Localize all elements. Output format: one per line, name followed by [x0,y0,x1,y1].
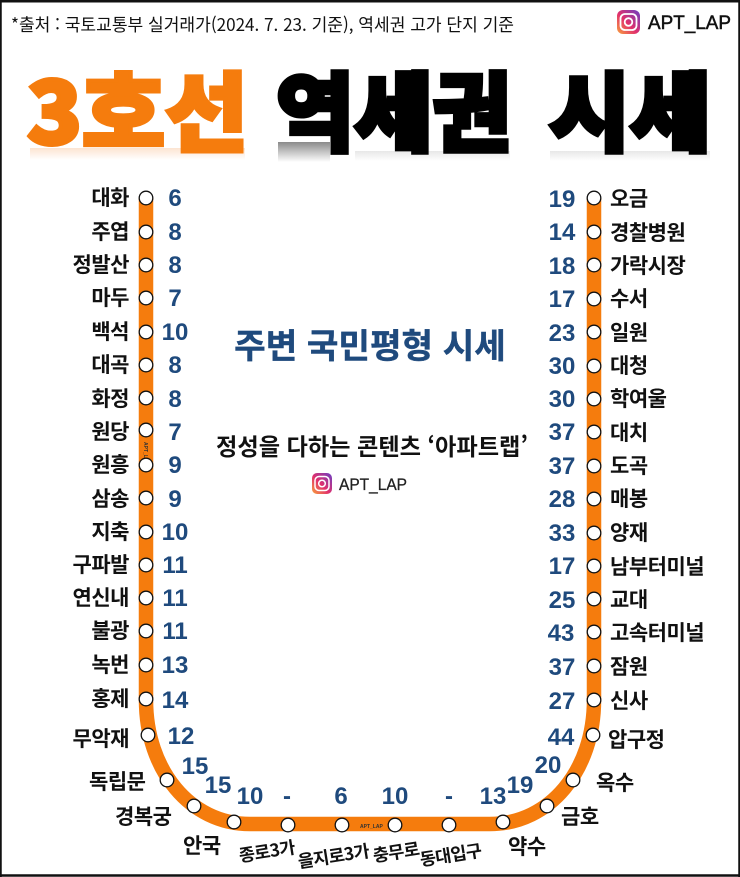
station names: left: 지축 [91,516,129,546]
prices: bottom: 15 [205,772,231,799]
station names: left: 백석 [91,316,129,346]
station names: right: 가락시장 [610,250,685,280]
prices: left: 13 [162,652,188,679]
stations: left column [139,191,155,742]
prices: bottom: 10 [382,783,408,810]
station names: left: 연신내 [73,582,129,612]
station names: left: 홍제 [91,683,129,713]
prices: right: 27 [549,688,575,715]
station names: right: 양재 [610,517,648,547]
prices: right: 37 [549,419,575,446]
station names: left: 마두 [91,282,129,312]
station names: right: 신사 [610,685,648,715]
prices: left [162,185,194,750]
station names: right: 매봉 [610,483,648,513]
station names: right: 경찰병원 [610,217,685,247]
title reflection [30,142,710,162]
center brand [312,473,407,494]
station names: right: 압구정 [608,724,664,754]
title: 역세권: 역세권 [276,44,511,169]
station names: bottom: 독립문 [89,766,146,796]
prices: right: 37 [549,453,575,480]
station names: bottom: 경복궁 [115,801,172,831]
station names: left: 대화 [91,182,129,212]
prices: bottom: - [283,783,291,810]
line 3 rail [146,198,594,824]
prices: bottom: - [445,783,453,810]
station names: bottom: 옥수 [596,767,634,797]
station names: bottom: 금호 [561,801,599,831]
prices: left: 11 [162,552,188,579]
station names: left: 원당 [91,416,129,446]
prices: right: 44 [548,724,575,751]
prices: right: 33 [549,520,575,547]
prices: left: 8 [168,352,182,379]
prices: left: 7 [168,285,182,312]
prices: left: 10 [162,519,188,546]
stations: right column [586,191,601,742]
prices: left: 7 [168,419,182,446]
station names: left: 정발산 [73,249,129,279]
brand: top right instagram [617,10,731,34]
prices: bottom: 10 [237,783,263,810]
prices: left: 8 [168,252,182,279]
station names: left: 삼송 [91,483,129,513]
prices: right: 18 [549,253,575,280]
prices: bottom [182,752,561,810]
title: 시세: 시세 [549,44,711,169]
prices: left: 9 [168,452,182,479]
prices: left: 8 [168,219,182,246]
prices: right: 17 [549,553,575,580]
prices: right: 30 [549,353,575,380]
station names: bottom [89,766,634,874]
prices: left: 11 [162,585,188,612]
prices: right: 43 [548,620,574,647]
prices: bottom: 19 [507,772,533,799]
prices: right: 25 [549,587,575,614]
station names: right: 대치 [610,417,648,447]
prices: right [548,186,576,751]
stations: bottom curve [160,773,580,832]
station names: left: 불광 [91,615,129,645]
source note: *출처 : 국토교통부 실거래가(2024. 7. 23. 기준), 역세권 고가 단지 기준 [11,12,514,37]
station names: bottom: 동대입구 [418,837,484,872]
station names: left: 화정 [91,383,129,413]
station names: bottom: 충무로 [371,836,421,868]
center heading: 주변 국민평형 시세 [234,318,506,368]
station names: left: 주엽 [91,216,129,246]
prices: right: 14 [549,219,576,246]
rail watermarks [142,442,383,830]
prices: right: 23 [549,320,575,347]
station names: bottom: 종로3가 [237,834,297,868]
station names: right: 오금 [610,183,648,213]
prices: right: 28 [549,486,575,513]
prices: right: 19 [549,186,575,213]
station names: right: 학여울 [610,383,667,413]
prices: left: 10 [162,319,188,346]
station names: bottom: 을지로3가 [296,838,371,874]
center brand: APT_LAP [339,476,407,494]
station names: left: 구파발 [73,549,129,579]
station names: right: 수서 [610,283,648,313]
prices: left: 14 [162,687,189,714]
prices: right: 17 [549,286,575,313]
prices: left: 11 [162,618,188,645]
station names: bottom: 안국 [183,830,221,860]
station names: right: 대청 [610,350,648,380]
station names: bottom: 약수 [508,831,546,861]
station names: left: 녹번 [91,649,129,679]
station names: left: 원흥 [91,449,129,479]
brand: top right instagram: APT_LAP [648,13,731,34]
prices: left: 12 [168,723,194,750]
prices: right: 30 [549,386,575,413]
prices: left: 6 [168,185,182,212]
prices: bottom: 15 [182,753,208,780]
station names: left [73,182,129,753]
station names: right: 잠원 [610,651,648,681]
prices: bottom: 13 [480,783,506,810]
station names: right: 도곡 [610,450,648,480]
prices: bottom: 20 [535,752,561,779]
station names: right: 일원 [610,317,648,347]
rail watermarks: APT_LAP [142,442,148,465]
prices: left: 8 [168,386,182,413]
prices: left: 9 [168,486,182,513]
center tagline: 정성을 다하는 콘텐츠 ‘아파트랩’ [216,428,528,462]
station names: right: 고속터미널 [610,617,704,647]
title: 3호선: 3호선 [27,44,248,169]
station names: left: 대곡 [91,349,129,379]
station names: right: 교대 [610,584,648,614]
station names: left: 무악재 [73,723,129,753]
station names: right: 남부터미널 [610,551,704,581]
prices: bottom: 6 [334,783,348,810]
station names: right [608,183,704,754]
prices: right: 37 [549,654,575,681]
rail watermarks: APT_LAP [360,824,383,830]
